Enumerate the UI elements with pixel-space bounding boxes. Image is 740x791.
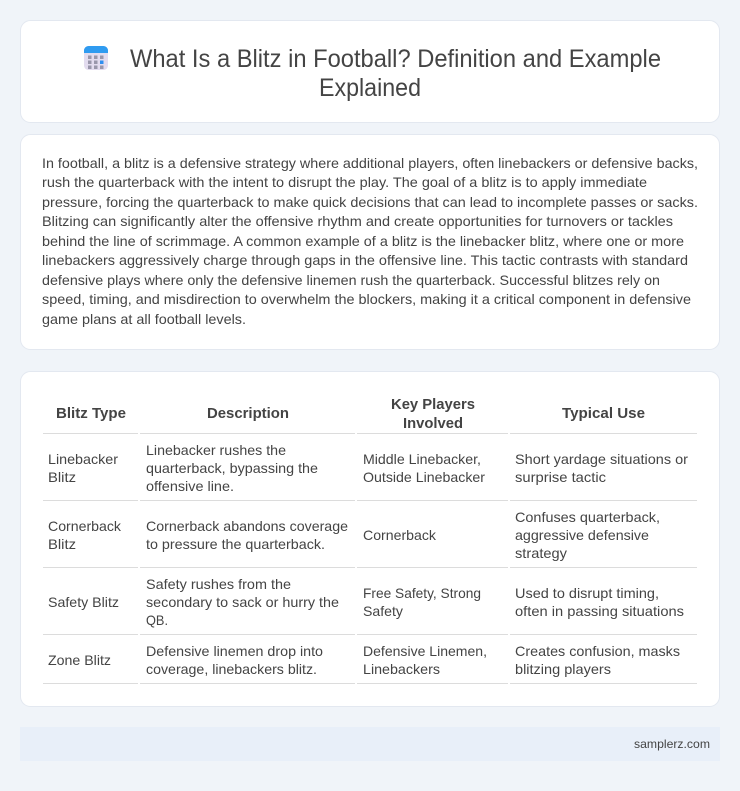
table row: linebacker blitz: Linebacker rushes the [146,442,286,458]
table header: Typical Use [562,405,645,422]
text block: definition: defensive plays where only the defensive linemen rush the quarterback. Successful blitzes rely on [42,272,660,288]
table row: linebacker blitz: Outside Linebacker [363,469,485,485]
title: Explained [319,74,421,102]
table row: cornerback blitz: Cornerback [48,518,122,534]
title [130,45,661,102]
icon: calendar [84,46,108,70]
text block: definition [42,155,698,327]
panel: blitz types table [20,372,720,706]
table row: safety blitz: Safety Blitz [48,594,119,610]
text block: definition: speed, timing, and misdirection to overwhelm the blockers, making it a critical component in defensive [42,291,691,307]
table row: linebacker blitz: Short yardage situations or [515,451,688,467]
table header: Description [207,405,289,422]
table row: cornerback blitz: Confuses quarterback, [515,509,660,525]
table row: safety blitz: Free Safety, Strong [363,585,481,601]
table row: zone blitz: Defensive Linemen, [363,643,487,659]
text block: definition: pressure, forcing the quarterback to make quick decisions that can lead to incomplete passes or sacks. [42,194,698,210]
table row: zone blitz [48,643,680,677]
table row: safety blitz: Safety rushes from the [146,576,291,592]
table row: safety blitz: QB. [146,612,168,628]
table header: Involved [403,415,463,432]
panel: definition paragraph [20,134,720,350]
table row: cornerback blitz: aggressive defensive [515,527,649,543]
table row: cornerback blitz: strategy [515,545,567,561]
text block: definition: game plans at all football levels. [42,311,246,327]
table row: safety blitz [48,576,684,628]
text block: definition: In football, a blitz is a defensive strategy where additional players, often linebackers or defensive backs, [42,155,698,171]
table row: zone blitz: blitzing players [515,661,611,677]
table header [56,396,645,432]
text block: definition: linebackers aggressively charge through gaps in the offensive line. This tactic contrasts with standard [42,252,688,268]
footer: samplerz.com [634,737,710,751]
table row: zone blitz: Creates confusion, masks [515,643,680,659]
footer [20,727,720,761]
table row: linebacker blitz [48,442,688,494]
title: What Is a Blitz in Football? Definition and Example [130,45,661,73]
panel: title card [20,20,720,122]
table row: cornerback blitz [48,509,660,561]
table row: zone blitz: Zone Blitz [48,652,111,668]
table row: linebacker blitz: Middle Linebacker, [363,451,481,467]
text block: definition: behind the line of scrimmage. A common example of a blitz is the linebacker blitz, where one or more [42,233,684,249]
table header: Blitz Type [56,405,126,422]
table row: zone blitz: coverage, linebackers blitz. [146,661,317,677]
table header: Key Players [391,396,475,413]
text block: definition: rush the quarterback with the intent to disrupt the play. The goal of a blitz is to apply immediate [42,174,647,190]
text block: definition: Blitzing can significantly alter the offensive rhythm and create opportunities for turnovers or tackles [42,213,673,229]
table row: safety blitz: Used to disrupt timing, [515,585,659,601]
table row: cornerback blitz: to pressure the quarterback. [146,536,325,552]
table row: safety blitz: often in passing situations [515,603,684,619]
table row: linebacker blitz: surprise tactic [515,469,606,485]
table row: cornerback blitz: Cornerback abandons coverage [146,518,348,534]
table row: cornerback blitz: Blitz [48,536,76,552]
table row: linebacker blitz: offensive line. [146,478,234,494]
table row: safety blitz: secondary to sack or hurry the [146,594,339,610]
table row: linebacker blitz: Linebacker [48,451,118,467]
table row: zone blitz: Defensive linemen drop into [146,643,323,659]
table row: cornerback blitz: Cornerback [363,527,437,543]
table row: linebacker blitz: Blitz [48,469,76,485]
table row: safety blitz: Safety [363,603,403,619]
table row: linebacker blitz: quarterback, bypassing the [146,460,318,476]
table row: zone blitz: Linebackers [363,661,440,677]
